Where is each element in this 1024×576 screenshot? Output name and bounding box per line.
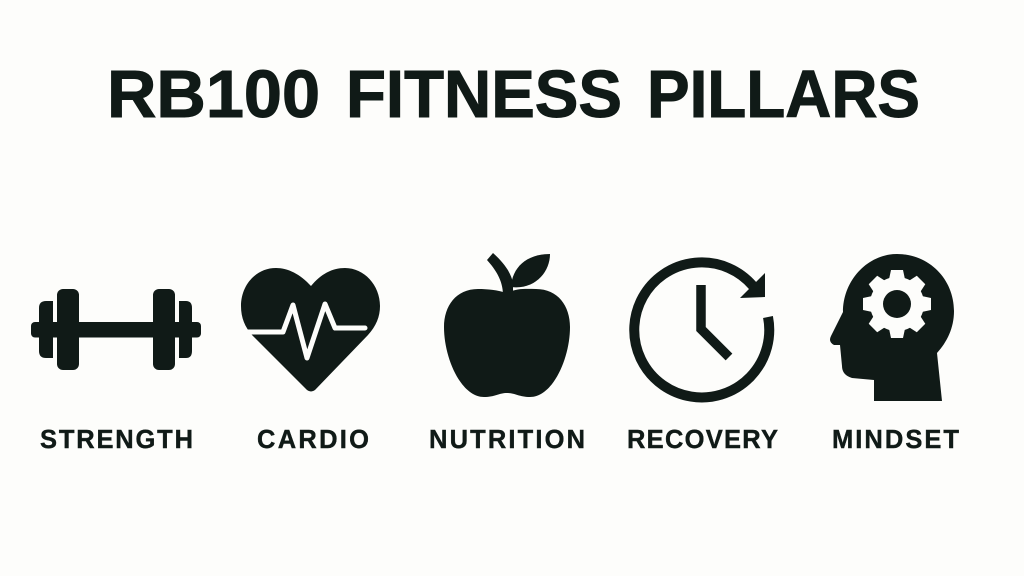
icon: head with gear <box>830 254 954 401</box>
label: recovery: RECOVERY <box>627 426 778 454</box>
pillar: cardio <box>241 268 380 454</box>
label: mindset: MINDSET <box>832 426 959 454</box>
pillar: mindset <box>830 254 959 454</box>
pillar: nutrition <box>429 253 585 454</box>
icon: dumbbell <box>31 289 201 370</box>
title: FITNESS <box>346 57 622 132</box>
icon: apple <box>444 253 570 397</box>
gear <box>863 270 931 338</box>
pillar: strength <box>31 289 201 454</box>
title: PILLARS <box>647 57 920 132</box>
label: nutrition: NUTRITION <box>429 426 585 454</box>
label: cardio: CARDIO <box>257 426 369 454</box>
title: RB100 <box>107 57 320 132</box>
icon: clock with arrow <box>634 262 769 397</box>
icon: heart with pulse line <box>241 268 380 392</box>
title <box>107 57 920 132</box>
pillar: recovery <box>627 262 778 454</box>
label: strength: STRENGTH <box>40 426 193 454</box>
